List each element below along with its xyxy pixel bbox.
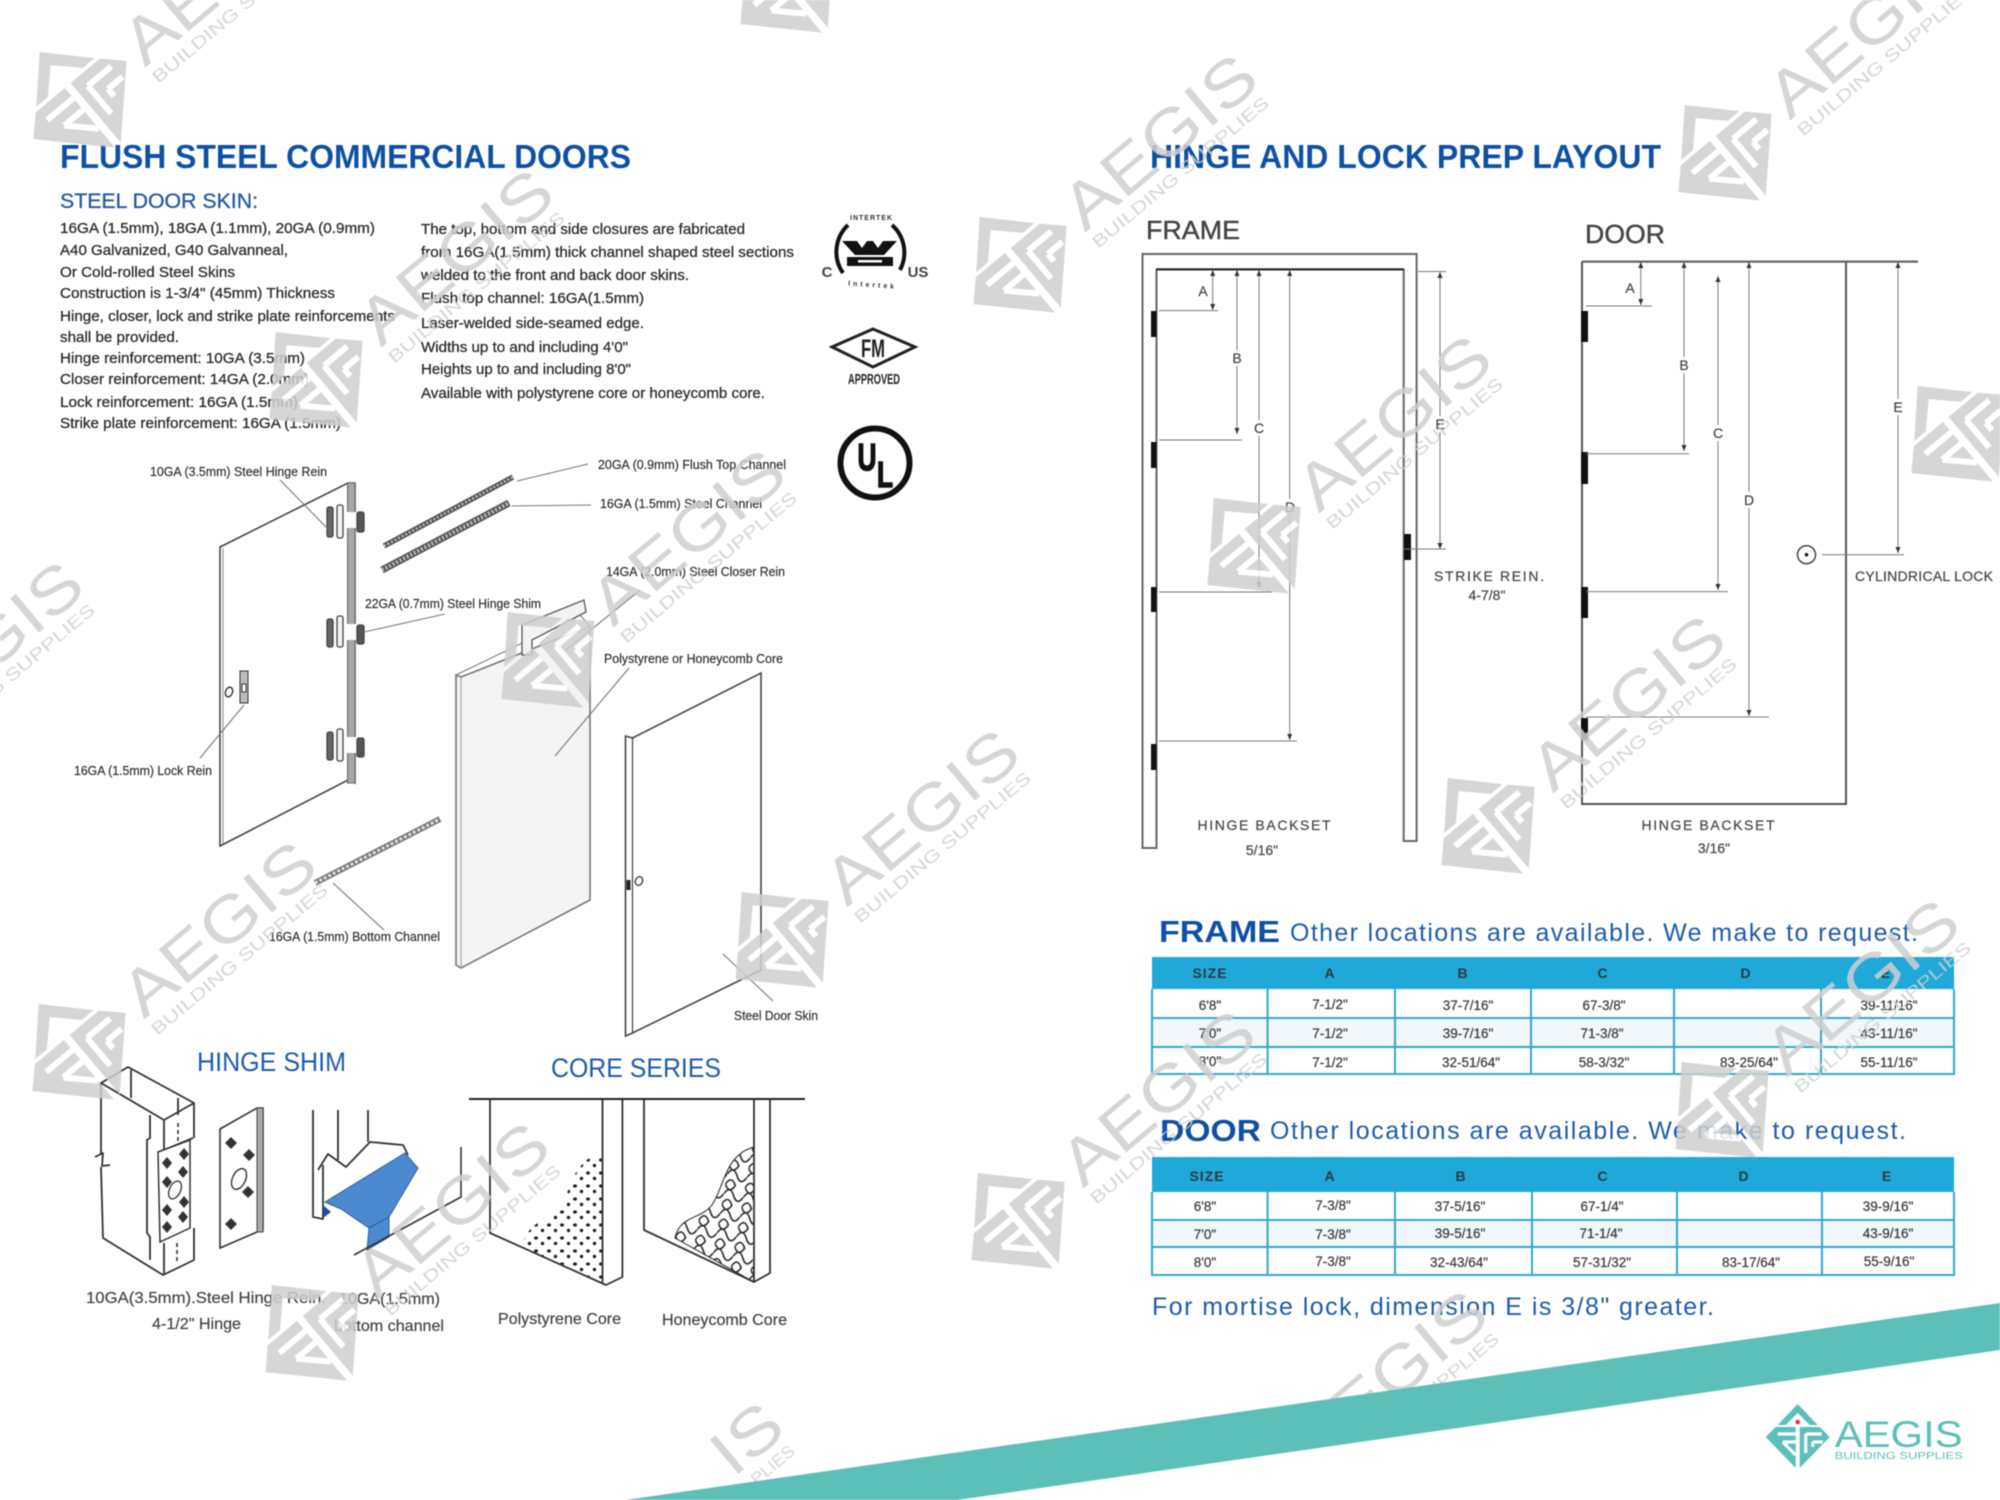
callout labels: assembly parts: 14GA (2.0mm) Steel Closer Rein: [606, 565, 785, 579]
diagram: door layout: D: [1744, 492, 1754, 508]
icon: FM approved mark: FM: [861, 335, 885, 363]
honeycomb core: [644, 1100, 770, 1282]
watermark: bottom channel: AEGIS: [340, 1107, 563, 1312]
table: door dimensions: 7-3/8": [1315, 1198, 1351, 1213]
table: frame dimensions: 83-25/64": [1720, 1055, 1778, 1070]
captions: hinge shim and core series: 4-1/2" Hinge: [152, 1316, 241, 1333]
note: mortise lock: For mortise lock, dimension E is 3/8" greater.: [1152, 1293, 1714, 1321]
core panel: [456, 600, 590, 968]
watermark: frame drawing: BUILDING SUPPLIES: [1323, 374, 1507, 533]
heading: frame drawing: FRAME: [1146, 215, 1240, 245]
table: door dimensions: 8'0": [1194, 1255, 1216, 1270]
heading: frame locations note: [1159, 914, 1918, 949]
text block: closures and core specification: from 16GA(1.5mm) thick channel shaped steel sections: [421, 244, 794, 261]
heading: frame locations note: FRAME: [1159, 914, 1280, 949]
text block: door skin specification: A40 Galvanized, G40 Galvanneal,: [60, 242, 288, 259]
callout labels: assembly parts: 16GA (1.5mm) Lock Rein: [74, 764, 212, 778]
callout labels: assembly parts: Polystyrene or Honeycomb Core: [604, 652, 783, 666]
polystyrene core: [490, 1100, 622, 1285]
diagram: frame layout: B: [1232, 350, 1242, 366]
table: door dimensions: 6'8": [1194, 1199, 1216, 1214]
watermark: bottom channel: [225, 1091, 581, 1417]
captions: hinge shim and core series: 10GA(1.5mm): [339, 1291, 440, 1308]
table: frame dimensions: D: [1740, 965, 1752, 981]
watermark: top right: BUILDING SUPPLIES: [1794, 0, 1978, 140]
watermark: door drawing: AEGIS: [1516, 600, 1739, 805]
text block: door skin specification: Hinge reinforcement: 10GA (3.5mm): [60, 350, 305, 367]
watermark: door heading: BUILDING SUPPLIES: [1087, 1049, 1271, 1208]
diagram: door layout: E: [1893, 399, 1903, 415]
watermark: top centre: [700, 0, 871, 69]
icon: intertek certification mark: US: [908, 264, 928, 281]
watermark: door skin: [695, 698, 1051, 1024]
icon: FM approved mark: APPROVED: [848, 371, 900, 388]
watermark: middle assembly: BUILDING SUPPLIES: [617, 488, 801, 647]
watermark: bottom channel: BUILDING SUPPLIES: [381, 1161, 565, 1320]
table: frame dimensions: SIZE: [1192, 965, 1228, 981]
text block: door skin specification: shall be provided.: [60, 329, 179, 346]
text block: door skin specification: Hinge, closer, lock and strike plate reinforcements: [60, 308, 395, 325]
title: hinge and lock prep layout: HINGE AND LOCK PREP LAYOUT: [1150, 138, 1661, 175]
teal corner band: [625, 1303, 2000, 1500]
watermark: right title: BUILDING SUPPLIES: [1089, 93, 1273, 252]
leader lines: [200, 464, 773, 1001]
diagram: frame layout: D: [1285, 499, 1295, 515]
text block: door skin specification: [60, 220, 395, 432]
diagram: frame layout: 4-7/8": [1469, 587, 1505, 603]
table: door dimensions: 71-1/4": [1579, 1226, 1623, 1241]
watermark: middle assembly: AEGIS: [576, 434, 799, 639]
heading: door locations note: DOOR: [1160, 1113, 1261, 1148]
table: frame dimensions: [1152, 957, 1954, 1074]
table: door dimensions: 39-5/16": [1435, 1226, 1485, 1241]
captions: hinge shim and core series: bottom channel: [334, 1318, 444, 1335]
icon: intertek certification mark: Intertek: [848, 280, 894, 291]
watermark: frame drawing: [1167, 304, 1523, 630]
diagram: frame layout: A: [1198, 283, 1208, 299]
watermark: top-left: [0, 0, 349, 184]
diagram: exploded door assembly: [200, 464, 773, 1036]
diagram: door layout: A: [1625, 280, 1635, 296]
table: door dimensions: D: [1738, 1168, 1750, 1184]
callout labels: assembly parts: 16GA (1.5mm) Steel Channel: [600, 497, 762, 511]
diagram: frame layout: STRIKE REIN.: [1434, 568, 1544, 584]
table: door dimensions: B: [1455, 1168, 1467, 1184]
text block: closures and core specification: Heights up to and including 8'0": [421, 361, 631, 378]
table: door dimensions: 7-3/8": [1315, 1254, 1351, 1269]
diagram: door layout: 3/16": [1698, 840, 1730, 856]
diagram: door layout: [1581, 262, 1994, 856]
diagram: frame layout: HINGE BACKSET: [1198, 817, 1331, 833]
watermark: hinge shim: AEGIS: [107, 826, 330, 1031]
table: frame dimensions: 7-1/2": [1312, 1026, 1348, 1041]
heading: door locations note: [1160, 1113, 1906, 1148]
heading: core series: CORE SERIES: [551, 1053, 721, 1083]
table: frame dimensions: 32-51/64": [1442, 1055, 1500, 1070]
diagram: door layout: HINGE BACKSET: [1642, 817, 1775, 833]
captions: hinge shim and core series: Honeycomb Core: [662, 1312, 787, 1329]
icon: intertek certification mark: INTERTEK: [850, 215, 892, 222]
callout labels: assembly parts: 10GA (3.5mm) Steel Hinge Rein: [150, 465, 327, 479]
text block: door skin specification: Closer reinforcement: 14GA (2.0mm): [60, 371, 309, 388]
logo: aegis building supplies: AEGIS: [1835, 1414, 1963, 1455]
text block: door skin specification: Strike plate reinforcement: 16GA (1.5mm): [60, 415, 341, 432]
table: door dimensions: 37-5/16": [1435, 1199, 1485, 1214]
heading: door locations note: Other locations are available. We make to request.: [1270, 1117, 1906, 1145]
channels: [315, 477, 513, 883]
table: frame dimensions: 67-3/8": [1582, 998, 1626, 1013]
watermark: bottom left fragment: IS: [696, 1387, 797, 1489]
watermark: door skin: AEGIS: [810, 714, 1033, 919]
text block: closures and core specification: [420, 221, 794, 402]
table: door dimensions: [1152, 1157, 1954, 1275]
text block: closures and core specification: Widths up to and including 4'0": [421, 339, 628, 356]
table: frame dimensions: 7-1/2": [1312, 997, 1348, 1012]
text block: closures and core specification: Laser-welded side-seamed edge.: [421, 315, 644, 332]
icon: UL listing mark: U: [858, 437, 876, 479]
text block: closures and core specification: Flush top channel: 16GA(1.5mm): [421, 290, 644, 307]
watermark: middle assembly: [461, 418, 817, 744]
watermark: frame table: BUILDING SUPPLIES: [1791, 938, 1975, 1097]
watermark: top right: [1638, 0, 1994, 237]
icon: FM approved mark: [832, 329, 915, 388]
table: door dimensions: 43-9/16": [1863, 1226, 1913, 1241]
callout labels: assembly parts: [74, 458, 818, 1023]
table: door dimensions: 32-43/64": [1430, 1255, 1488, 1270]
heading: frame locations note: Other locations are available. We make to request.: [1290, 919, 1918, 947]
table: door dimensions: 57-31/32": [1573, 1255, 1631, 1270]
table: frame dimensions: B: [1457, 965, 1469, 981]
table: frame dimensions: 8'0": [1199, 1054, 1221, 1069]
watermark: right title: AEGIS: [1048, 39, 1271, 244]
diagram: frame layout: E: [1435, 416, 1445, 432]
watermark: frame table: AEGIS: [1750, 884, 1973, 1089]
table: frame dimensions: 71-3/8": [1580, 1026, 1624, 1041]
table: frame dimensions: C: [1597, 965, 1609, 981]
table: frame dimensions: 58-3/32": [1579, 1055, 1629, 1070]
watermark: door skin: BUILDING SUPPLIES: [851, 768, 1035, 927]
watermark: frame table: [1635, 868, 1991, 1194]
table: frame dimensions: 43-11/16": [1860, 1026, 1918, 1041]
callout labels: assembly parts: 20GA (0.9mm) Flush Top Channel: [598, 458, 786, 472]
table: door dimensions: C: [1597, 1168, 1609, 1184]
diagram: door layout: B: [1679, 357, 1689, 373]
callout labels: assembly parts: 16GA (1.5mm) Bottom Channel: [269, 930, 440, 944]
watermark: left second: AEGIS: [344, 154, 567, 359]
table: frame dimensions: E: [1881, 965, 1891, 981]
table: door dimensions: SIZE: [1189, 1168, 1225, 1184]
icon: UL listing mark: L: [877, 454, 893, 495]
table: door dimensions: 39-9/16": [1863, 1199, 1913, 1214]
watermark: hinge shim: [0, 810, 348, 1136]
watermark: bottom left fragment: PLIES: [747, 1441, 799, 1489]
watermark: door heading: AEGIS: [1046, 995, 1269, 1200]
text block: door skin specification: Lock reinforcement: 16GA (1.5mm): [60, 394, 298, 411]
outer door skin: [626, 673, 761, 1036]
table: frame dimensions: 55-11/16": [1860, 1055, 1918, 1070]
table: frame dimensions: 39-11/16": [1860, 998, 1918, 1013]
text block: closures and core specification: Available with polystyrene core or honeycomb core.: [421, 385, 765, 402]
captions: hinge shim and core series: Polystyrene Core: [498, 1311, 621, 1328]
title: flush steel commercial doors: FLUSH STEEL COMMERCIAL DOORS: [60, 138, 631, 175]
icon: UL listing mark: [840, 428, 910, 498]
text block: door skin specification: 16GA (1.5mm), 18GA (1.1mm), 20GA (0.9mm): [60, 220, 375, 237]
diagram: bottom channel: [313, 1110, 461, 1255]
diagram: frame layout: 5/16": [1246, 842, 1278, 858]
icon: intertek certification mark: C: [822, 264, 833, 281]
table: door dimensions: 7'0": [1194, 1227, 1216, 1242]
heading: hinge shim: HINGE SHIM: [197, 1047, 346, 1077]
watermark: frame drawing: AEGIS: [1282, 320, 1505, 525]
table: frame dimensions: 39-7/16": [1443, 1026, 1493, 1041]
watermark: left edge fragment: [0, 546, 104, 759]
text block: closures and core specification: welded to the front and back door skins.: [420, 267, 689, 284]
watermark: left second: [229, 138, 585, 464]
captions: hinge shim and core series: 10GA(3.5mm).Steel Hinge Rein.: [86, 1290, 326, 1307]
table: door dimensions: 55-9/16": [1864, 1254, 1914, 1269]
diagram: door layout: CYLINDRICAL LOCK: [1855, 568, 1994, 584]
diagram: frame layout: C: [1254, 420, 1264, 436]
heading: door drawing: DOOR: [1585, 219, 1665, 249]
text block: door skin specification: Or Cold-rolled Steel Skins: [60, 264, 235, 281]
logo: aegis building supplies: [1766, 1404, 1963, 1468]
table: frame dimensions: A: [1324, 965, 1336, 981]
diagram: polystyrene and honeycomb cores: [469, 1099, 805, 1285]
watermark: door heading: [931, 979, 1287, 1305]
icon: intertek certification mark: [822, 215, 928, 291]
watermark: bottom centre text: SUPPLIES: [1410, 1329, 1503, 1411]
text block: closures and core specification: The top, bottom and side closures are fabricated: [421, 221, 745, 238]
diagram: hinge shim plate: [220, 1108, 263, 1248]
inner door skin with hinge reinforcements: [220, 483, 364, 846]
watermark: right title: [933, 23, 1289, 349]
white corner below band: [957, 1350, 2000, 1500]
text block: door skin specification: Construction is 1-3/4" (45mm) Thickness: [60, 285, 335, 302]
watermark: hinge shim: BUILDING SUPPLIES: [148, 880, 332, 1039]
diagram: frame layout: [1142, 254, 1544, 858]
diagram: door layout: C: [1713, 425, 1723, 441]
table: frame dimensions: 7-1/2": [1312, 1055, 1348, 1070]
callout labels: assembly parts: 22GA (0.7mm) Steel Hinge Shim: [365, 597, 541, 611]
table: door dimensions: 67-1/4": [1580, 1199, 1624, 1214]
watermark: left second: BUILDING SUPPLIES: [385, 208, 569, 367]
watermark: door drawing: [1401, 584, 1757, 910]
table: frame dimensions: 7'0": [1199, 1026, 1221, 1041]
table: door dimensions: 7-3/8": [1315, 1227, 1351, 1242]
table: door dimensions: E: [1882, 1168, 1892, 1184]
logo: aegis building supplies: BUILDING SUPPLIES: [1835, 1451, 1963, 1462]
heading: steel door skin: STEEL DOOR SKIN:: [60, 190, 258, 213]
captions: hinge shim and core series: [86, 1290, 787, 1335]
table: door dimensions: 83-17/64": [1722, 1255, 1780, 1270]
table: frame dimensions: 6'8": [1199, 998, 1221, 1013]
watermark: door drawing: BUILDING SUPPLIES: [1557, 654, 1741, 813]
watermark: bottom centre text: AEGIS: [1278, 1275, 1501, 1480]
table: door dimensions: A: [1324, 1168, 1336, 1184]
callout labels: assembly parts: Steel Door Skin: [734, 1009, 818, 1023]
watermark: right edge: [1871, 347, 2000, 518]
table: frame dimensions: 37-7/16": [1443, 998, 1493, 1013]
diagram: hinge reinforcement box: [95, 1067, 194, 1275]
